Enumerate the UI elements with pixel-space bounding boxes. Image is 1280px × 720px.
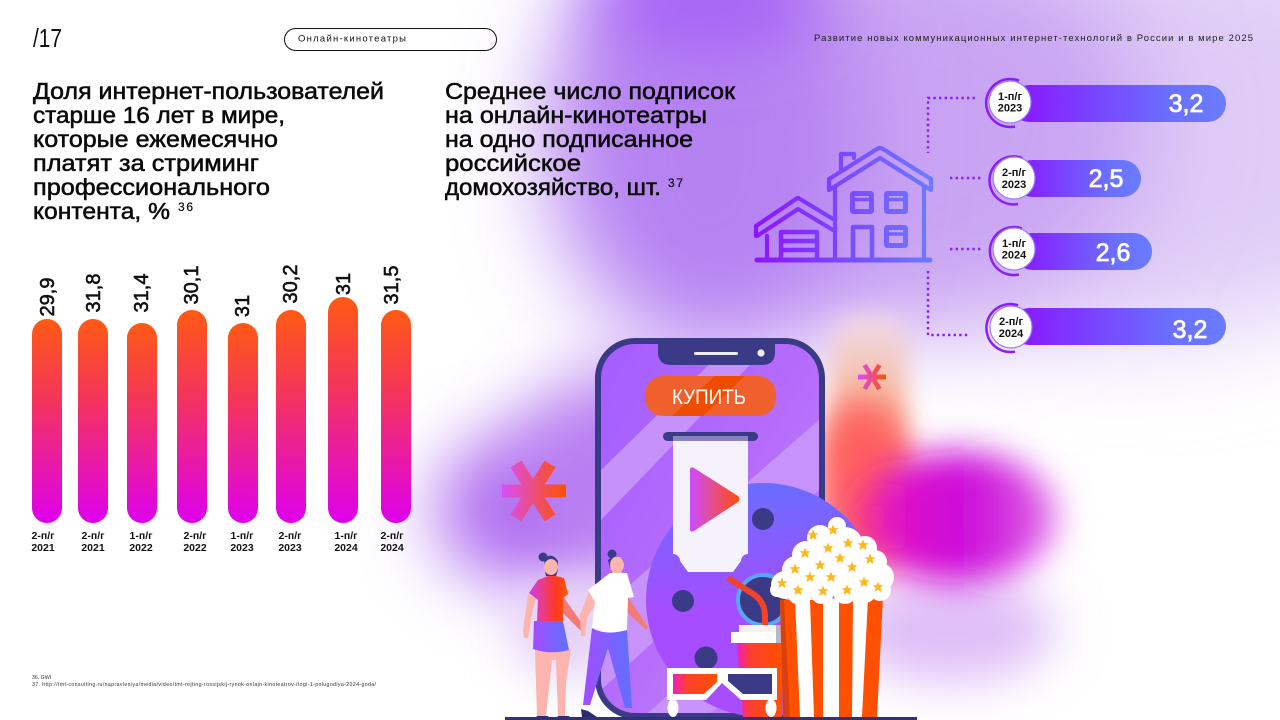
bar: first half 2024, 2.6: 2,6 [1096, 239, 1130, 267]
illustration: man [580, 550, 648, 717]
bar chart: paying for streaming: 31 [232, 295, 254, 317]
illustration: popcorn bucket [770, 517, 894, 717]
section pill: online cinemas [284, 28, 496, 50]
illustration: woman [523, 552, 584, 720]
buy button [645, 376, 776, 416]
heading: share of internet users: Доля интернет-пользователей [33, 78, 384, 104]
bar chart: paying for streaming: 30,1 [181, 266, 203, 304]
icon: small asterisk [858, 364, 886, 390]
bar chart: paying for streaming: 2022 [129, 542, 153, 554]
section pill: online cinemas: Онлайн-кинотеатры [298, 34, 406, 44]
play icon [690, 467, 740, 532]
bar chart: paying for streaming: 2-п/г [184, 530, 207, 542]
heading: average subscriptions: Среднее число подписок [445, 78, 736, 104]
bar chart: paying for streaming: 2022 [183, 542, 207, 554]
illustration: phone with ticket [595, 338, 880, 720]
bar chart: paying for streaming: 2024 [334, 542, 358, 554]
bar chart: paying for streaming [31, 265, 411, 554]
bar: first half 2024, 2.6: 1-п/г [1002, 238, 1026, 250]
heading: share of internet users: которые ежемесячно [33, 126, 278, 152]
footnotes: 37. http://tmt-consulting.ru/napravleniya/media/video/tmt-rejting-rossijskij-rynok-onlajn-kinoteatrov-itogi-1-polugodiya-2024-goda/ [32, 682, 377, 688]
bar chart: paying for streaming: 2021 [81, 542, 105, 554]
bar: second half 2023, 2.5: 2023 [1002, 179, 1026, 191]
bar: first half 2024, 2.6: 2024 [1002, 250, 1027, 262]
heading: average subscriptions: 37 [668, 176, 683, 190]
bar: second half 2024, 3.2 [986, 304, 1226, 352]
bar chart: paying for streaming: 2-п/г [32, 530, 55, 542]
footnotes [32, 675, 377, 688]
ticket [673, 441, 748, 572]
dotted connectors [928, 98, 982, 335]
heading: average subscriptions: на одно подписанное [445, 126, 693, 152]
buy button: КУПИТЬ [672, 386, 746, 409]
bar chart: paying for streaming: 1-п/г [231, 530, 254, 542]
bar chart: paying for streaming: 1-п/г [335, 530, 358, 542]
bar: second half 2023, 2.5 [989, 156, 1141, 204]
bar: first half 2023, 3.2: 1-п/г [998, 91, 1022, 103]
report title: Развитие новых коммуникационных интернет-технологий в России и в мире 2025 [814, 33, 1253, 44]
bar chart: paying for streaming: 2021 [31, 542, 55, 554]
bar: second half 2023, 2.5: 2,5 [1089, 165, 1123, 193]
heading: average subscriptions [445, 78, 736, 200]
bar chart: paying for streaming: 2023 [278, 542, 302, 554]
bar chart: paying for streaming: 31 [333, 273, 355, 295]
heading: share of internet users: профессионального [33, 174, 270, 200]
bar: first half 2023, 3.2 [986, 79, 1226, 127]
bar: first half 2023, 3.2: 2023 [998, 102, 1022, 114]
bar chart: paying for streaming: 2024 [380, 542, 404, 554]
heading: share of internet users [33, 78, 384, 224]
bar chart: paying for streaming: 2-п/г [82, 530, 105, 542]
heading: share of internet users: 36 [178, 200, 193, 214]
illustration: soda cup [728, 578, 782, 718]
bar chart: paying for streaming: 1-п/г [130, 530, 153, 542]
bar: second half 2024, 3.2: 2024 [999, 328, 1024, 340]
bar chart: paying for streaming: 31,8 [83, 274, 105, 312]
heading: share of internet users: контента, % [33, 198, 170, 224]
bar chart: paying for streaming: 2023 [230, 542, 254, 554]
bar chart: paying for streaming: 30,2 [280, 265, 302, 303]
footnotes: 36. GWI [32, 675, 51, 681]
icon: big asterisk [502, 461, 566, 521]
bar: second half 2024, 3.2: 2-п/г [999, 316, 1023, 328]
heading: share of internet users: платят за стриминг [33, 150, 259, 176]
ground line [505, 717, 917, 720]
bar chart: paying for streaming: 31,4 [131, 274, 153, 312]
film reel [646, 483, 880, 717]
bar: second half 2024, 3.2: 3,2 [1173, 316, 1207, 344]
icon: house [756, 148, 931, 260]
illustration: 3D glasses [667, 668, 777, 717]
bar: first half 2023, 3.2: 3,2 [1169, 90, 1203, 118]
bar: first half 2024, 2.6 [990, 227, 1152, 275]
heading: average subscriptions: домохозяйство, шт. [445, 174, 661, 200]
heading: average subscriptions: российское [445, 150, 581, 176]
heading: average subscriptions: на онлайн-кинотеатры [445, 102, 707, 128]
bar: second half 2023, 2.5: 2-п/г [1002, 167, 1026, 179]
bar chart: paying for streaming: 31,5 [381, 266, 403, 304]
bar chart: paying for streaming: 29,9 [37, 278, 59, 316]
bar chart: paying for streaming: 2-п/г [279, 530, 302, 542]
heading: share of internet users: старше 16 лет в мире, [33, 102, 285, 128]
background: gradient blobs [389, 0, 1280, 707]
bar chart: paying for streaming: 2-п/г [381, 530, 404, 542]
slide number: /17 [33, 23, 62, 53]
